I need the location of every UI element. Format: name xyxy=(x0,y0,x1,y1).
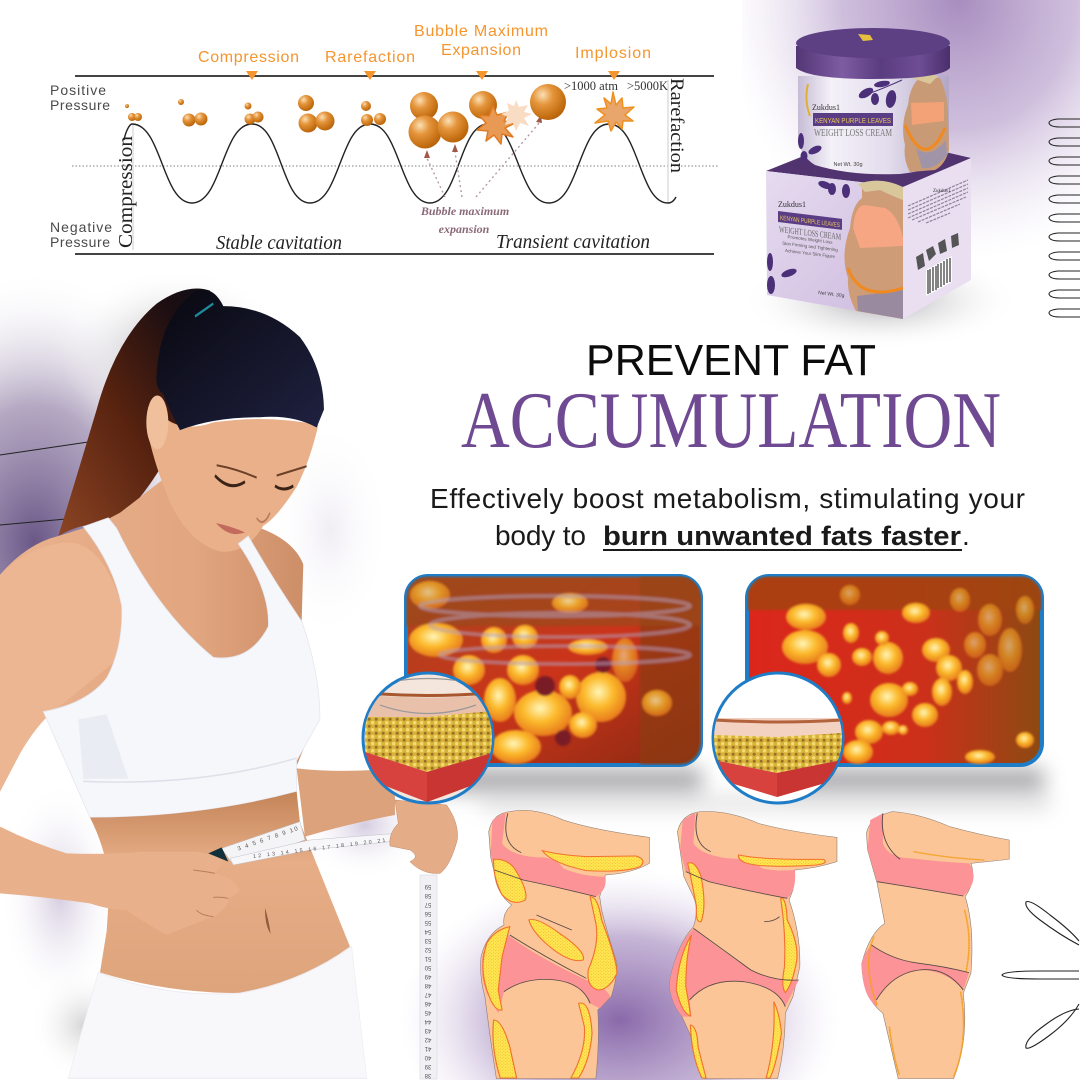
axis labels xyxy=(50,78,687,254)
phase labels: Implosion xyxy=(575,45,651,62)
midriff xyxy=(90,792,350,993)
box front face: Achieve Your Slim Figure xyxy=(785,248,836,259)
vertical tape: 59 xyxy=(424,883,431,889)
phase labels: Expansion xyxy=(441,42,521,59)
axis labels: >1000 atm xyxy=(564,79,618,93)
pants xyxy=(68,947,367,1078)
vertical tape: 46 xyxy=(424,1000,431,1006)
heading: PREVENT FAT xyxy=(586,336,876,385)
woman measuring waist xyxy=(0,289,458,1079)
heading xyxy=(461,336,1001,465)
jar body xyxy=(798,74,949,174)
axis labels: Bubble maximum xyxy=(420,204,509,218)
inset: skin cross-section before xyxy=(363,673,493,803)
tape measure band: 12 13 14 15 16 17 18 19 20 21 xyxy=(253,838,386,860)
axis labels: Negative xyxy=(50,219,112,235)
product: jar and box xyxy=(766,28,971,319)
body text: Effectively boost metabolism, stimulating your xyxy=(430,483,1025,514)
vertical tape: 39 xyxy=(424,1063,431,1069)
jar lid xyxy=(796,28,950,79)
vertical tape: 55 xyxy=(424,919,431,925)
panel: fat cells after treatment xyxy=(747,576,1042,765)
chart: cavitation pressure diagram xyxy=(0,0,742,268)
phase labels: Bubble Maximum xyxy=(414,23,548,40)
vertical tape: 57 xyxy=(424,901,431,907)
phase labels: Rarefaction xyxy=(325,49,415,66)
implosion bursts xyxy=(477,106,515,144)
box side face: Zukdus1 xyxy=(933,189,951,194)
vertical tape xyxy=(420,875,437,1079)
box front face xyxy=(766,171,903,319)
vertical tape: 47 xyxy=(424,991,431,997)
hair top xyxy=(156,290,324,430)
phase labels xyxy=(198,23,651,80)
vertical tape: 53 xyxy=(424,937,431,943)
axis labels: >5000K xyxy=(627,79,668,93)
body stage 3 xyxy=(862,812,1009,1079)
box top face xyxy=(766,152,971,187)
box front face: Zukdus1 xyxy=(778,200,806,209)
vertical tape: 45 xyxy=(424,1009,431,1015)
tape measure band: 3 4 5 6 7 8 9 10 xyxy=(237,826,299,853)
body text xyxy=(430,483,1025,551)
axis labels: Pressure xyxy=(50,234,110,250)
body illustrations xyxy=(481,810,1009,1079)
box front face: Net Wt. 30g xyxy=(818,290,845,299)
vertical tape: 40 xyxy=(424,1054,431,1060)
jar body: WEIGHT LOSS CREAM xyxy=(814,128,892,139)
axis labels: Pressure xyxy=(50,97,110,113)
box front face: WEIGHT LOSS CREAM xyxy=(779,224,841,242)
vertical tape: 49 xyxy=(424,973,431,979)
box front face: KENYAN PURPLE LEAVES xyxy=(780,215,840,229)
body stage 2 xyxy=(670,811,837,1079)
jar body: Net Wt. 30g xyxy=(833,162,863,168)
axis labels: Compression xyxy=(115,136,137,248)
vertical tape: 51 xyxy=(424,955,431,961)
vertical tape: 56 xyxy=(424,910,431,916)
face xyxy=(148,409,318,552)
torso skin xyxy=(0,477,320,792)
right hand xyxy=(390,800,458,874)
vertical tape: 38 xyxy=(424,1072,431,1078)
vertical tape: 52 xyxy=(424,946,431,952)
vertical tape: 58 xyxy=(424,892,431,898)
phase labels: Compression xyxy=(198,49,299,66)
body text: body to xyxy=(495,520,586,551)
jar body: KENYAN PURPLE LEAVES xyxy=(815,116,891,125)
axis labels: Stable cavitation xyxy=(216,232,342,254)
inset: skin cross-section after xyxy=(713,673,843,803)
vertical tape: 50 xyxy=(424,964,431,970)
body text: . xyxy=(962,520,970,551)
pressure wave xyxy=(124,124,676,203)
box side face xyxy=(903,158,971,319)
sports bra xyxy=(43,518,320,817)
box front face: Promotes Weight Loss xyxy=(787,234,833,245)
axis labels: Transient cavitation xyxy=(496,231,650,253)
axis labels: Rarefaction xyxy=(666,78,687,174)
left arm xyxy=(0,542,122,792)
right arm xyxy=(297,768,395,837)
decorative star strokes xyxy=(1002,902,1079,1048)
ear xyxy=(146,396,168,449)
tape measure band xyxy=(208,822,417,865)
vertical tape: 41 xyxy=(424,1045,431,1051)
axis labels: expansion xyxy=(439,222,490,236)
decorative spring xyxy=(1049,119,1080,317)
axis labels: Positive xyxy=(50,82,106,98)
body text: burn unwanted fats faster xyxy=(603,521,962,551)
dotted arrows xyxy=(426,122,540,197)
left forearm and hand xyxy=(0,827,240,935)
vertical tape: 43 xyxy=(424,1027,431,1033)
vertical tape: 48 xyxy=(424,982,431,988)
vertical tape: 44 xyxy=(424,1018,431,1024)
vertical tape: 42 xyxy=(424,1036,431,1042)
bubbles xyxy=(125,84,566,148)
decorative lines left xyxy=(0,441,95,525)
ponytail xyxy=(58,289,220,536)
body stage 1 xyxy=(481,810,649,1079)
box front face: Skin Firming and Tightening xyxy=(782,241,838,252)
vertical tape: 54 xyxy=(424,928,431,934)
panel: fat cells during cavitation xyxy=(406,576,702,765)
jar body: Zukdus1 xyxy=(812,103,840,112)
